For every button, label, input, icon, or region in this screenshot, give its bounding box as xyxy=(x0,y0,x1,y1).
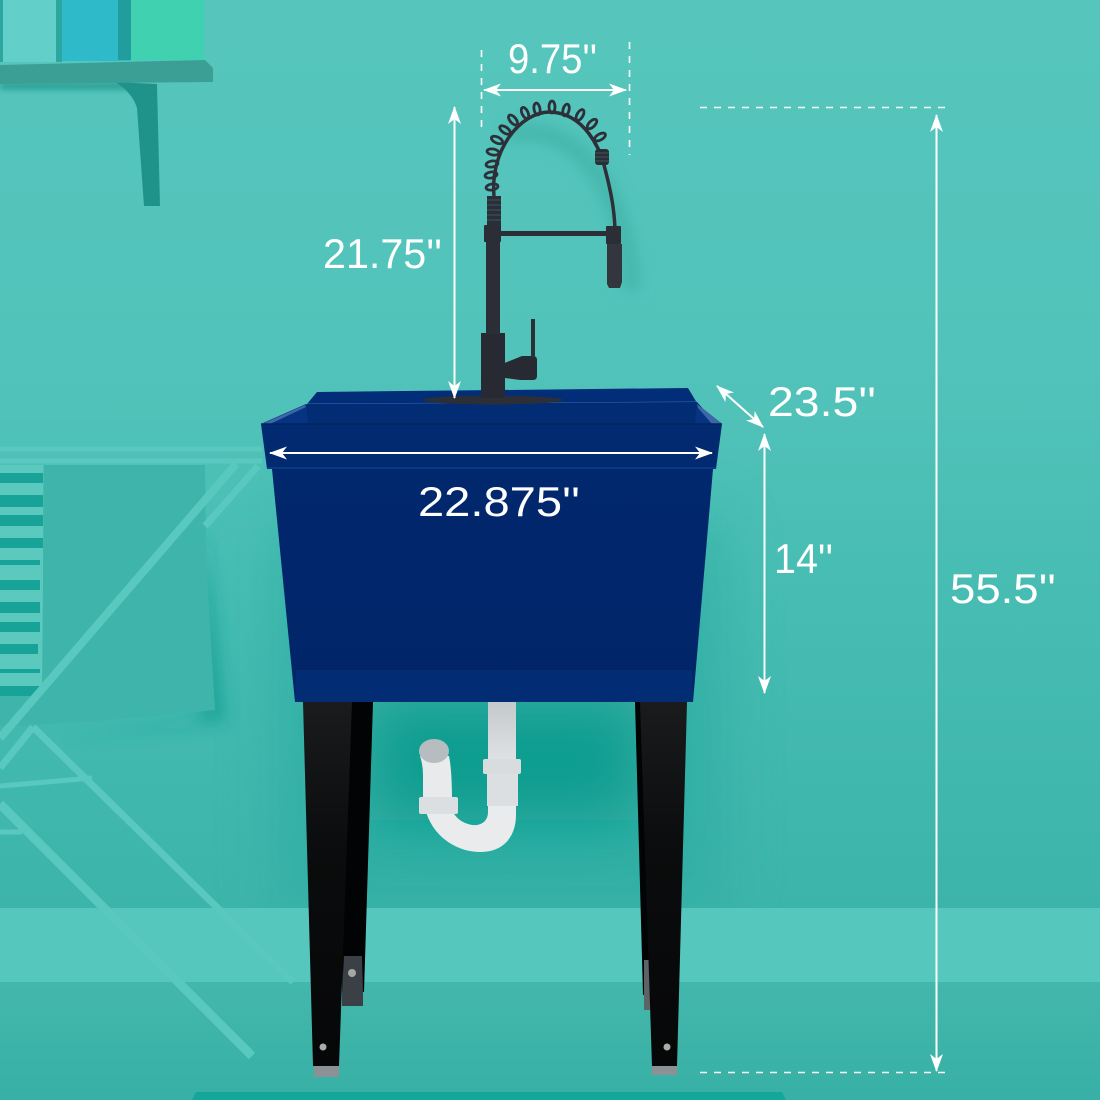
label 21.75: 21.75'' xyxy=(323,230,442,277)
crossbar xyxy=(500,231,607,236)
basin interior xyxy=(262,402,720,428)
rug edge xyxy=(192,1092,786,1100)
shelf plank xyxy=(0,60,213,84)
wall shadow behind sink xyxy=(280,520,720,908)
right leg xyxy=(635,702,687,1075)
bottles xyxy=(0,0,204,62)
faucet shadow xyxy=(505,132,632,290)
leveling bracket xyxy=(342,956,363,1006)
drain P-trap xyxy=(419,702,521,852)
faucet xyxy=(423,101,622,404)
tub body xyxy=(272,469,713,702)
front rim xyxy=(261,424,722,469)
shelf shadow xyxy=(0,82,135,90)
hose collar xyxy=(595,149,609,165)
plain towel xyxy=(0,465,215,726)
foot xyxy=(652,1066,677,1075)
ribbed coil xyxy=(487,196,501,226)
baseboard xyxy=(0,908,1100,983)
elbow arm xyxy=(420,756,452,802)
rack frame xyxy=(0,449,293,1056)
trap bend xyxy=(426,803,516,852)
label 14: 14'' xyxy=(774,535,833,582)
faucet body xyxy=(481,333,505,398)
label 9.75: 9.75'' xyxy=(508,35,597,82)
elbow opening xyxy=(419,739,449,763)
striped towel xyxy=(0,465,43,697)
dimension: overall height 55.5 xyxy=(700,108,1056,1072)
spring arch xyxy=(485,101,615,228)
towel shadow xyxy=(60,520,226,738)
drying rack xyxy=(0,449,293,1056)
label 55.5: 55.5'' xyxy=(950,565,1056,612)
spray head xyxy=(606,226,621,244)
sink tub xyxy=(261,388,722,702)
left leg xyxy=(303,702,373,1077)
deck plate xyxy=(423,396,563,404)
shelf with bottles xyxy=(0,0,213,206)
back rim xyxy=(307,388,697,404)
riser pipe xyxy=(486,240,500,334)
dimension: faucet reach 9.75 xyxy=(482,35,630,155)
bottom band xyxy=(295,670,693,702)
foot xyxy=(314,1066,339,1077)
floor xyxy=(0,982,1100,1100)
shelf bracket xyxy=(115,82,160,206)
dimension: depth 23.5 xyxy=(717,378,876,427)
tailpiece xyxy=(488,702,516,762)
label 23.5: 23.5'' xyxy=(768,378,876,425)
label 22.875: 22.875'' xyxy=(418,478,580,525)
slip nuts xyxy=(487,772,518,806)
handle xyxy=(497,356,537,380)
